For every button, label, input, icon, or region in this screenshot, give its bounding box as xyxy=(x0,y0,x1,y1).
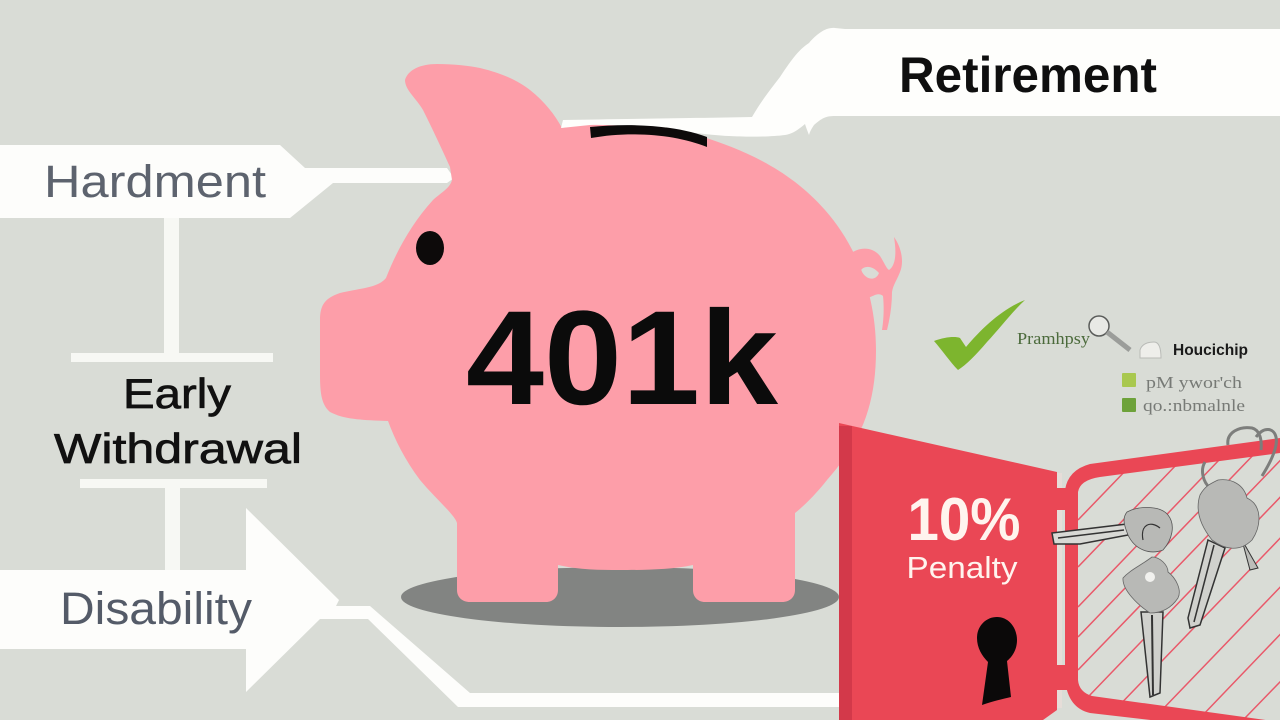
icon: keyhole xyxy=(977,617,1017,705)
safe: open door with keys xyxy=(839,423,1280,720)
label: Penalty: Penalty xyxy=(906,550,1018,585)
key: right xyxy=(1188,480,1259,628)
icon: green box 2 xyxy=(1122,398,1136,412)
icon: green box 1 xyxy=(1122,373,1136,387)
text: line 2: qo.:nbmalnle xyxy=(1143,396,1245,415)
icon: green check mark xyxy=(934,300,1025,370)
label: Hardment: Hardment xyxy=(44,156,267,207)
pig tail xyxy=(850,237,902,330)
icon: small key xyxy=(1089,316,1130,350)
label: Hardment xyxy=(0,145,454,218)
door panel xyxy=(839,423,1057,720)
label: Pramhpay: Pramhpsy xyxy=(1017,329,1091,348)
checklist: eligibility xyxy=(934,300,1248,415)
label: Early Withdrawal xyxy=(54,370,302,472)
banner: Retirement: Retirement xyxy=(899,47,1157,103)
label: Houcichip: Houcichip xyxy=(1173,342,1248,359)
label: 10%: 10% xyxy=(908,486,1020,553)
pig eye xyxy=(416,231,444,265)
label: 401k: 401k xyxy=(466,284,778,433)
text: line 1: pM ywor'ch xyxy=(1146,373,1243,392)
key ring xyxy=(1203,428,1276,488)
pig body xyxy=(320,64,876,602)
banner: Retirement xyxy=(561,28,1280,137)
coin slot xyxy=(590,125,707,147)
safe frame xyxy=(1065,438,1280,720)
icon: small card xyxy=(1140,342,1161,358)
label: Early Withdrawal: Early xyxy=(123,370,231,417)
arrow: Disability xyxy=(0,508,840,707)
hinge strip xyxy=(1057,473,1062,708)
hinge connectors xyxy=(1055,488,1068,690)
key: lower xyxy=(1123,557,1179,697)
arrow: Disability: Disability xyxy=(60,583,253,634)
hatch panel xyxy=(1078,435,1280,718)
label: Early Withdrawal: Withdrawal xyxy=(54,425,302,472)
key: horizontal xyxy=(1052,507,1172,552)
ground shadow xyxy=(401,567,839,627)
piggy bank xyxy=(320,64,902,602)
connector: early withdrawal tree xyxy=(71,215,273,572)
